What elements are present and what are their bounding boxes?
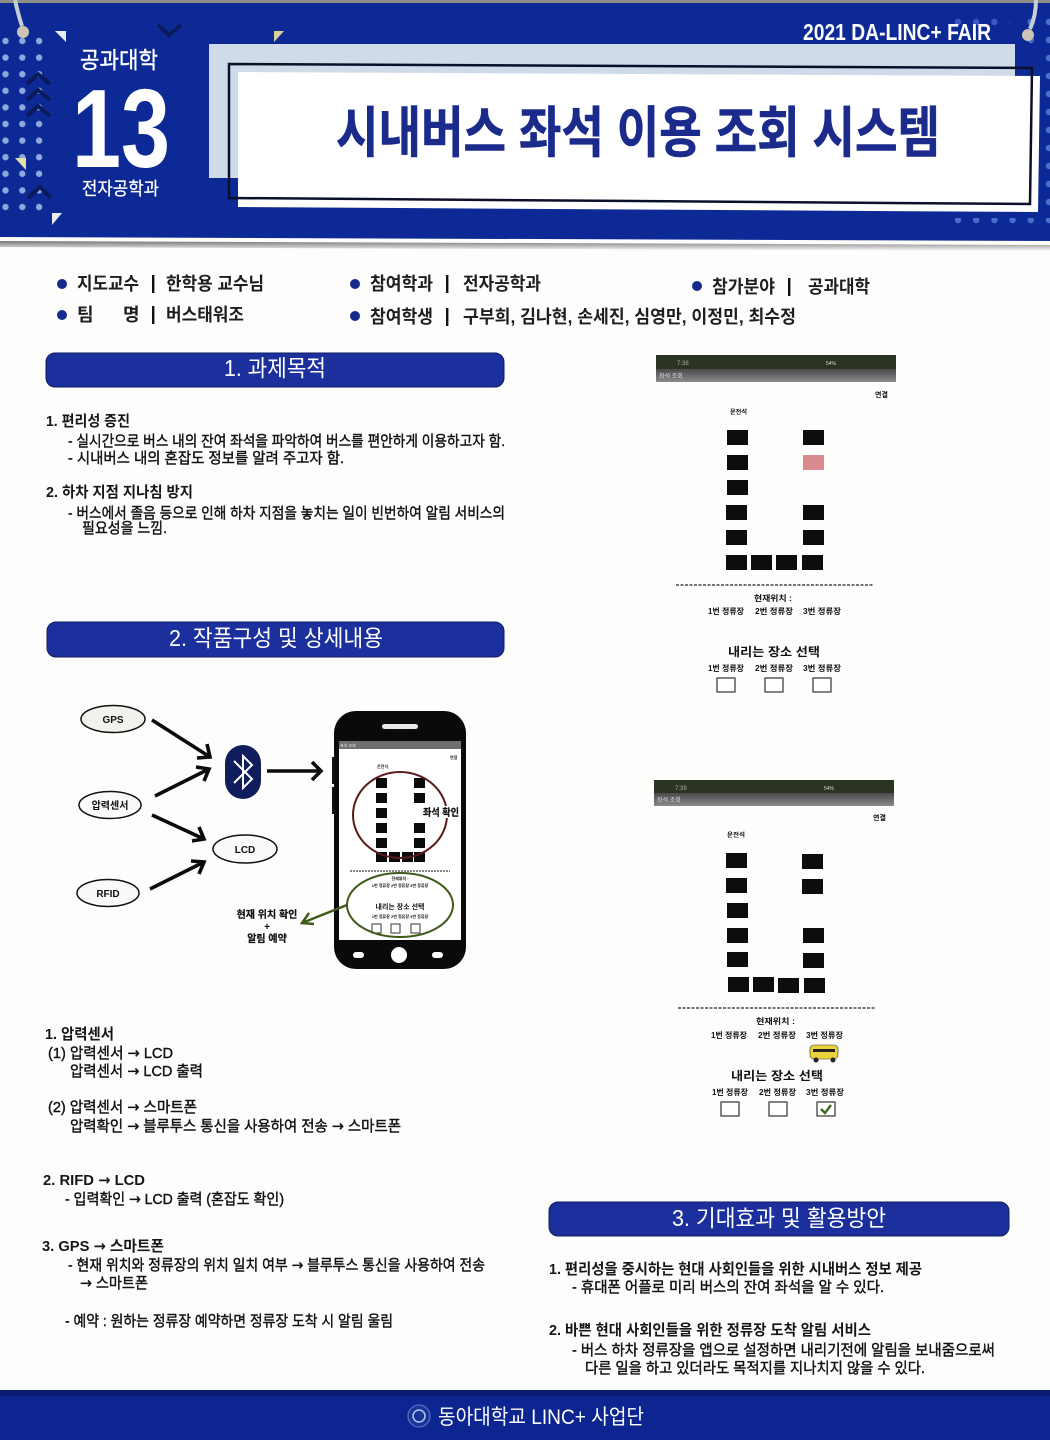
heading: section 3 xyxy=(549,1202,1009,1236)
app screenshot: seat status: 3번 정류장 xyxy=(803,663,842,673)
callout: location and alarm: 알림 예약 xyxy=(247,932,287,945)
ring binder holes xyxy=(17,26,29,38)
oval: GPS: GPS xyxy=(102,715,124,726)
app screenshot: stop selected: 좌석 조회 xyxy=(657,796,681,804)
text: section 1 body: 1. 편리성 증진 xyxy=(46,413,130,430)
project info: 한학용 교수님 xyxy=(166,274,264,294)
text: section 2 body: - 현재 위치와 정류장의 위치 일치 여부 → 블루투스 통신을 사용하여 전송 xyxy=(68,1256,485,1274)
title: 시내버스 좌석 이용 조회 시스템 xyxy=(336,102,940,164)
app screenshot: stop selected: 내리는 장소 선택 xyxy=(731,1069,823,1083)
text: section 1 body: - 실시간으로 버스 내의 잔여 좌석을 파악하여 버스를 편안하게 이용하고자 함. xyxy=(68,433,505,450)
oval: RFID xyxy=(77,880,139,906)
project info xyxy=(57,274,870,327)
text: section 3 body: 1. 편리성을 중시하는 현대 사회인들을 위한 시내버스 정보 제공 xyxy=(549,1261,922,1278)
app screenshot: stop selected: 1번 정류장 xyxy=(712,1087,749,1097)
header banner xyxy=(0,0,1050,251)
footer band xyxy=(0,1390,1050,1440)
footer label: 동아대학교 LINC+ 사업단 xyxy=(438,1406,644,1429)
app screenshot: stop selected: 2번 정류장 xyxy=(759,1087,797,1097)
text: section 1 body xyxy=(46,413,505,537)
icon: check mark xyxy=(821,1105,831,1113)
oval: LCD xyxy=(213,835,277,863)
text: section 2 body: (2) 압력센서 → 스마트폰 xyxy=(48,1098,197,1116)
arrows xyxy=(150,720,321,889)
booth number: 13 xyxy=(72,67,170,191)
project info: 명 xyxy=(123,305,140,325)
project info: 버스태워조 xyxy=(166,305,244,325)
diagram: system structure xyxy=(77,706,466,969)
oval: RFID: RFID xyxy=(96,889,120,900)
project info: 팀 xyxy=(77,305,94,325)
text: section 2 body: - 예약 : 원하는 정류장 예약하면 정류장 도착 시 알림 울림 xyxy=(65,1313,393,1330)
corner triangles xyxy=(55,31,66,42)
heading: section 1 xyxy=(46,353,504,387)
project info: 전자공학과 xyxy=(463,274,541,294)
fair label: 2021 DA-LINC+ FAIR xyxy=(803,19,991,45)
app screenshot: stop selected: 3번 정류장 xyxy=(806,1087,845,1097)
heading: section 2 xyxy=(47,622,504,657)
text: section 2 body: 압력확인 → 블루투스 통신을 사용하여 전송 → 스마트폰 xyxy=(70,1117,401,1135)
text: section 3 body: - 버스 하차 정류장을 앱으로 설정하면 내리기전에 알림을 보내줌으로써 xyxy=(572,1342,995,1359)
text: section 2 body: 압력센서 → LCD 출력 xyxy=(70,1062,203,1080)
oval: pressure sensor: 압력센서 xyxy=(92,799,128,812)
app screenshot: stop selected: 운전석 xyxy=(727,831,745,839)
app screenshot: seat status xyxy=(656,355,896,692)
project info: 참가분야 xyxy=(712,277,775,297)
heading: section 3: 3. 기대효과 및 활용방안 xyxy=(672,1205,886,1231)
text: section 2 body: 2. RIFD → LCD xyxy=(43,1171,145,1189)
app screenshot: seat status: 1번 정류장 xyxy=(708,606,745,616)
heading: section 2: 2. 작품구성 및 상세내용 xyxy=(169,625,383,651)
callout: location and alarm xyxy=(237,908,297,945)
text: section 1 body: - 시내버스 내의 혼잡도 정보를 알려 주고자 함. xyxy=(68,450,344,467)
app screenshot: stop selected: 현재위치 : xyxy=(756,1016,795,1026)
text: section 3 body: - 휴대폰 어플로 미리 버스의 잔여 좌석을 알 수 있다. xyxy=(572,1279,884,1296)
phone mockup: 연결 xyxy=(450,754,458,760)
phone mockup: 현재위치 : xyxy=(391,875,409,881)
phone mockup: 좌석 조회 xyxy=(340,742,356,748)
chevrons xyxy=(27,25,181,198)
phone mockup: 내리는 장소 선택 xyxy=(376,902,424,911)
app screenshot: stop selected: 1번 정류장 xyxy=(711,1030,748,1040)
text: section 2 body: 1. 압력센서 xyxy=(45,1026,114,1043)
callout: location and alarm: 현재 위치 확인 xyxy=(237,908,297,921)
app screenshot: seat status: 운전석 xyxy=(730,408,747,416)
icon: university seal xyxy=(408,1405,430,1427)
app screenshot: stop selected: 7:39 xyxy=(675,786,687,792)
app screenshot: seat status: 3번 정류장 xyxy=(803,606,842,616)
app screenshot: seat status: 2번 정류장 xyxy=(755,606,794,616)
text: section 3 body xyxy=(549,1261,995,1377)
app screenshot: stop selected: 연결 xyxy=(873,813,886,822)
app screenshot: seat status: 내리는 장소 선택 xyxy=(728,645,820,659)
arrow: green callout xyxy=(302,905,347,924)
text: section 2 body: 3. GPS → 스마트폰 xyxy=(42,1237,164,1255)
phone mockup: 1번 정류장 2번 정류장 3번 정류장 xyxy=(372,913,429,919)
text: section 2 body: (1) 압력센서 → LCD xyxy=(48,1044,173,1062)
text: section 2 body: → 스마트폰 xyxy=(80,1274,148,1292)
app screenshot: seat status: 54% xyxy=(826,361,837,367)
app screenshot: stop selected xyxy=(654,780,894,1116)
phone mockup: 1번 정류장 2번 정류장 3번 정류장 xyxy=(372,882,429,888)
oval: GPS xyxy=(81,706,145,732)
project info: 참여학생 xyxy=(370,307,433,327)
app screenshot: stop selected: 54% xyxy=(824,786,835,792)
heading: section 1: 1. 과제목적 xyxy=(224,355,326,381)
text: section 2 body xyxy=(42,1026,485,1330)
project info: 참여학과 xyxy=(370,274,433,294)
project info: 지도교수 xyxy=(77,274,139,294)
department label: 전자공학과 xyxy=(82,179,159,199)
app screenshot: seat status: 7:38 xyxy=(677,361,689,367)
decorative dot columns xyxy=(0,33,46,215)
callout: location and alarm: + xyxy=(264,922,270,933)
oval: LCD: LCD xyxy=(235,845,255,856)
text: section 2 body: - 입력확인 → LCD 출력 (혼잡도 확인) xyxy=(65,1190,284,1208)
text: section 3 body: 2. 바쁜 현대 사회인들을 위한 정류장 도착 알림 서비스 xyxy=(549,1322,871,1339)
phone mockup: 좌석 확인 xyxy=(423,806,459,819)
icon: bluetooth xyxy=(225,745,261,799)
icon: yellow bus xyxy=(810,1045,838,1062)
app screenshot: seat status: 현재위치 : xyxy=(754,593,792,603)
title panel xyxy=(209,44,1040,212)
phone mockup: 운전석 xyxy=(377,763,388,769)
app screenshot: stop selected: 2번 정류장 xyxy=(758,1030,797,1040)
project info: 구부희, 김나현, 손세진, 심영만, 이정민, 최수정 xyxy=(463,307,796,327)
app screenshot: stop selected: 3번 정류장 xyxy=(806,1030,844,1040)
app screenshot: seat status: 1번 정류장 xyxy=(708,663,745,673)
app screenshot: seat status: 연결 xyxy=(875,390,888,399)
text: section 1 body: - 버스에서 졸음 등으로 인해 하차 지점을 놓치는 일이 빈번하여 알림 서비스의 xyxy=(68,505,505,522)
project info: 공과대학 xyxy=(808,277,870,297)
oval: pressure sensor xyxy=(79,792,141,818)
app screenshot: seat status: 2번 정류장 xyxy=(755,663,794,673)
app screenshot: seat status: 좌석 조회 xyxy=(659,372,683,380)
college label: 공과대학 xyxy=(80,47,158,73)
text: section 1 body: 필요성을 느낌. xyxy=(82,520,167,537)
text: section 1 body: 2. 하차 지점 지나침 방지 xyxy=(46,484,193,501)
text: section 3 body: 다른 일을 하고 있더라도 목적지를 지나치지 않을 수 있다. xyxy=(585,1360,925,1377)
phone mockup xyxy=(332,711,466,969)
